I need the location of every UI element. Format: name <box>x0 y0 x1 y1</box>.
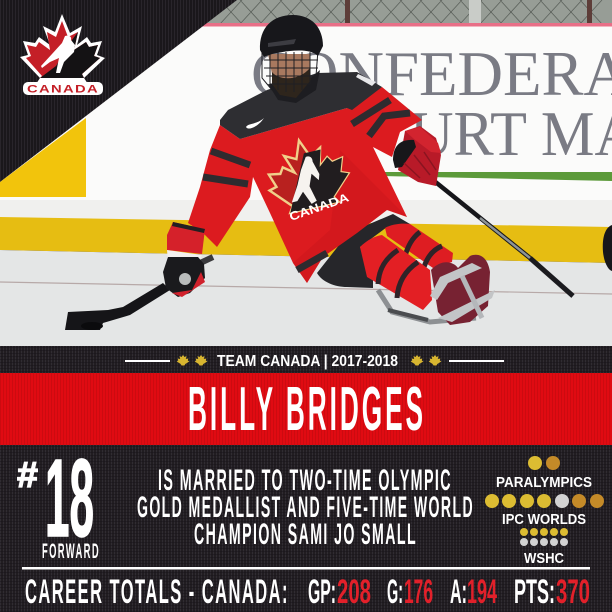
assists: A: <box>450 573 467 611</box>
gold leaves left <box>177 355 207 366</box>
lower leg <box>360 235 432 310</box>
pink top rail <box>200 23 612 26</box>
dark lower background <box>0 346 612 612</box>
dark corner triangle <box>0 0 237 182</box>
logo canada word: CANADA <box>27 84 99 96</box>
corner yellow panel <box>0 118 86 197</box>
career totals row: CAREER TOTALS - CANADA: <box>25 573 289 611</box>
jersey number block <box>17 437 100 563</box>
sleeve stripes <box>203 100 410 270</box>
wshc label: WSHC <box>524 551 564 567</box>
beard <box>272 68 311 98</box>
ice markings <box>0 282 612 294</box>
right rule <box>449 360 504 362</box>
right glove <box>393 126 441 186</box>
red name banner <box>0 373 612 445</box>
helmet shell <box>260 15 323 57</box>
assists: 194 <box>467 573 497 611</box>
left rule <box>125 360 170 362</box>
logo leaf <box>20 14 105 84</box>
cage <box>262 50 318 92</box>
jersey <box>188 72 422 283</box>
green board line <box>380 172 612 181</box>
object at right edge <box>603 225 612 271</box>
jersey red body <box>188 87 422 283</box>
rink glass and netting <box>207 0 612 23</box>
chest CANADA text: CANADA <box>287 190 351 224</box>
left hand stick and puck <box>65 257 213 330</box>
white rink boards <box>0 24 612 229</box>
upper leg <box>385 224 453 268</box>
season strip <box>125 353 504 370</box>
yellow kick band <box>0 217 612 263</box>
paralympics medals <box>528 456 560 470</box>
ice surface <box>0 250 612 347</box>
ipc worlds medals <box>485 494 604 508</box>
season text: TEAM CANADA | 2017-2018 <box>217 353 398 370</box>
sledge runners <box>378 290 476 322</box>
collar and chin guard <box>268 70 320 103</box>
scuffed kickplate <box>0 200 612 228</box>
points: 370 <box>556 573 590 611</box>
head and helmet <box>260 15 323 103</box>
text: FORWARD <box>42 540 100 563</box>
gold leaves right <box>411 355 441 366</box>
paralympics label: PARALYMPICS <box>496 475 592 491</box>
games played: GP: <box>308 573 336 611</box>
chest logo <box>266 137 350 214</box>
boots <box>430 255 495 325</box>
jersey shadow <box>293 150 407 283</box>
goals: G: <box>387 573 403 611</box>
text: 18 <box>45 437 94 560</box>
jersey dark yoke <box>220 72 382 139</box>
goals: 176 <box>404 573 433 611</box>
dark pants and sledge seat <box>317 214 410 288</box>
shoulder number <box>356 74 376 86</box>
ipc worlds label: IPC WORLDS <box>502 512 586 528</box>
right hand stick <box>433 180 573 296</box>
Hockey Canada logo <box>20 14 105 96</box>
games played: 208 <box>337 573 371 611</box>
board sponsor text <box>254 52 612 155</box>
player fact <box>137 464 474 551</box>
wshc medals <box>520 528 568 546</box>
face <box>268 54 310 78</box>
hash: # <box>17 454 38 495</box>
medal tally <box>485 456 604 567</box>
photo: sledge hockey player on ice <box>0 0 612 347</box>
helmet highlight <box>268 39 296 47</box>
points: PTS: <box>514 573 555 611</box>
nike swoosh <box>246 118 264 129</box>
left glove <box>163 222 205 297</box>
logo canada pill <box>23 82 103 95</box>
